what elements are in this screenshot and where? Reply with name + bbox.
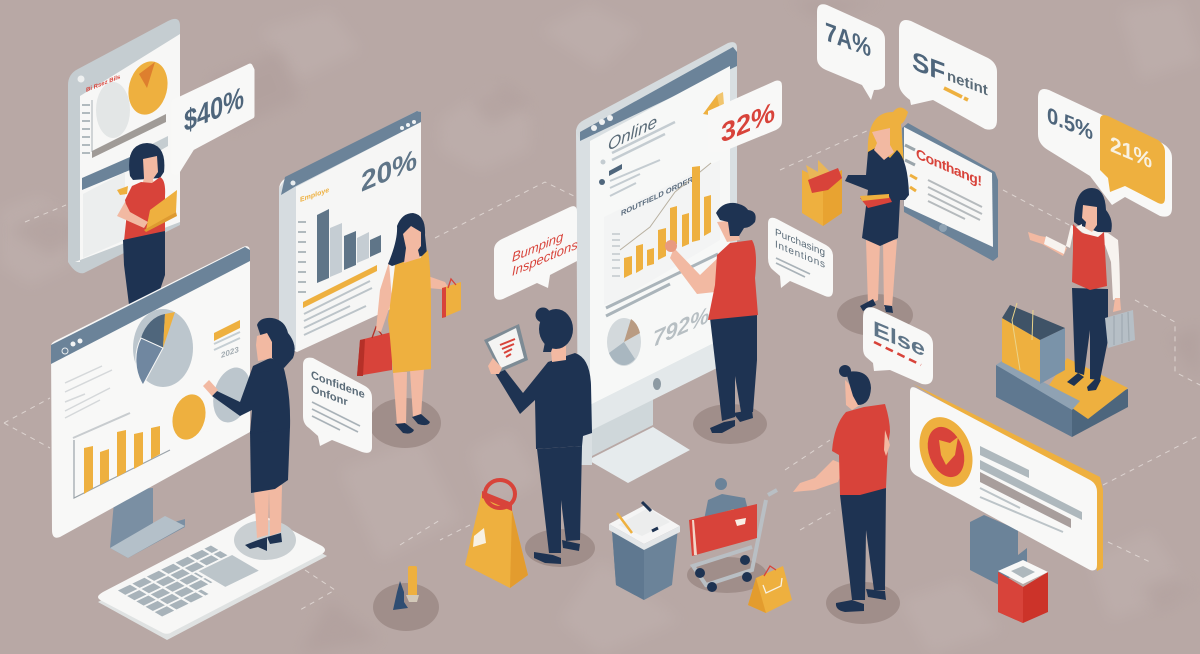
callout: Else: Else: [873, 316, 925, 362]
panel: central monitor: Online: [608, 111, 657, 155]
panel: keyboard: [98, 513, 327, 640]
icon: chess pieces on shadow: [373, 566, 439, 631]
figure: blonde woman with box: [802, 108, 913, 336]
callout: 0.5% and 21%: [1038, 89, 1172, 217]
panel: bar chart screen 20%: Employe: [300, 185, 329, 204]
callout: $40%: [174, 66, 252, 172]
callout: 71%: [817, 4, 885, 100]
figure: woman in yellow dress: [357, 213, 461, 448]
panel: main dashboard screen: 2023: [221, 345, 239, 360]
figure: woman with laptop: [117, 143, 177, 305]
callout: Else: [863, 307, 933, 384]
callout: Confidene Onfonr: [303, 358, 372, 453]
icon: gift box: [802, 160, 842, 226]
chart: [604, 160, 720, 305]
panel: Continuing tablet: [902, 123, 998, 261]
panel: monitor stand left: [110, 488, 185, 558]
figure: businesswoman at screen: [203, 318, 295, 551]
icon: bin with papers: [609, 502, 680, 600]
figure: woman with silver bag: [1028, 188, 1135, 391]
panel: Continuing tablet: Conthang!: [916, 147, 982, 190]
tablet: [484, 324, 528, 372]
figure: bearded man with tablet: [484, 308, 595, 567]
callout: SF netint: [899, 20, 997, 130]
panel: orange-edged sign: [910, 384, 1103, 571]
pie chart: [123, 57, 173, 119]
icon: small yellow bag: [748, 566, 792, 613]
callout: SF netint: SF: [912, 46, 945, 87]
icon: apple-style logo: [653, 378, 661, 390]
panel: central monitor: 792%: [653, 302, 709, 352]
callout: Purchasing Intentions: Purchasing: [775, 227, 825, 259]
callout: 32%: 32%: [721, 96, 775, 149]
bars: [317, 209, 381, 283]
callout: Bumping Inspections: [494, 206, 578, 300]
callout: Bumping Inspections: Bumping: [512, 229, 564, 265]
callout: 0.5% and 21%: 0.5%: [1047, 102, 1093, 145]
callout: Confidene Onfonr: Onfonr: [311, 383, 348, 409]
callout: $40%: $40%: [184, 80, 244, 139]
panel: stand and red box: [970, 515, 1048, 623]
keys: [122, 546, 259, 617]
pie chart: [133, 309, 193, 387]
silver bag: [1105, 310, 1135, 348]
panel: bar chart screen 20%: 20%: [361, 144, 417, 199]
person in cart: [704, 478, 748, 522]
icon: red box: [998, 560, 1048, 623]
callout: 0.5% and 21%: 21%: [1110, 131, 1152, 173]
icon: small arrow tag: [703, 92, 724, 116]
callout: Bumping Inspections: Inspections: [512, 237, 578, 279]
callout: SF netint: netint: [947, 67, 988, 99]
icon: shopping cart: [687, 478, 777, 593]
panel: bar chart screen 20%: [279, 111, 421, 352]
pie: [607, 318, 641, 366]
orange bag: [442, 279, 461, 318]
callout: 71%: 7A%: [825, 17, 871, 63]
bar chart: [74, 426, 170, 498]
panel: tablet with pie chart: Bi Rsez Bils: [86, 73, 121, 94]
panel: central monitor: [576, 42, 737, 483]
panel: main dashboard screen: [51, 246, 257, 538]
callout: Purchasing Intentions: [768, 218, 833, 297]
callout: Confidene Onfonr: Confidene: [311, 369, 365, 401]
figure: woman drawing on chart: [665, 203, 767, 444]
icon: yellow shopping bag: [465, 480, 528, 588]
callout: 32%: [708, 81, 782, 152]
chart: ROUTFIELD ORDER: [621, 175, 693, 218]
panel: tablet with pie chart: [68, 19, 180, 273]
red bag: [357, 327, 392, 376]
callout: Purchasing Intentions: Intentions: [775, 239, 825, 271]
icon: badge: [910, 410, 982, 494]
icon: platform with packages: [996, 303, 1128, 437]
figure: man in red shirt: [793, 365, 900, 624]
